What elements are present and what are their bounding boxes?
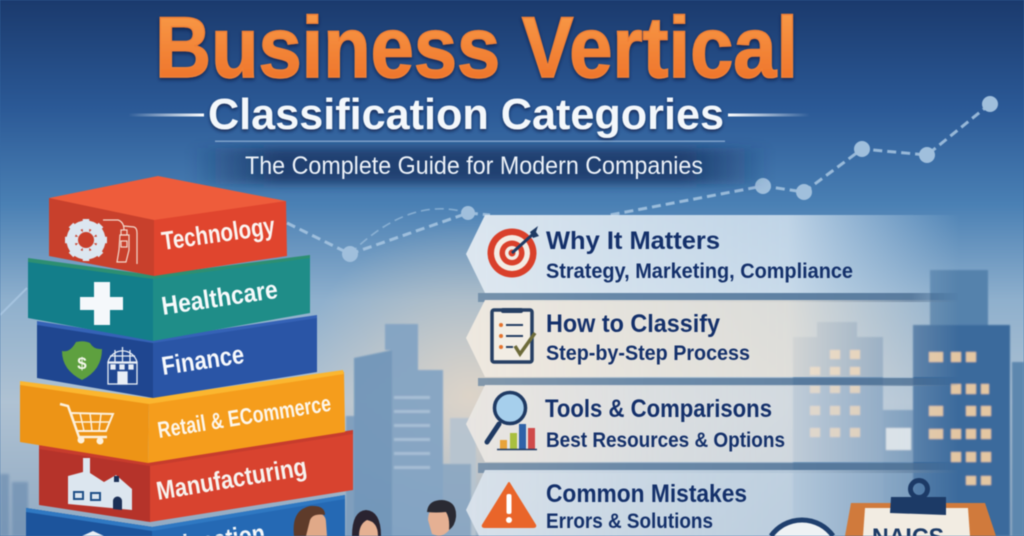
stacked blocks [20, 176, 353, 536]
banner: common mistakes [466, 470, 960, 536]
banner: why it matters [466, 215, 960, 302]
title: business vertical: Business Vertical [155, 0, 798, 96]
magnifier badge [771, 520, 833, 536]
block: manufacturing [39, 430, 353, 522]
banner: tools and comparisons [466, 385, 960, 473]
tagline: The Complete Guide for Modern Companies [245, 152, 703, 180]
text: errors and solutions: Errors & Solutions [546, 510, 713, 533]
icon: warning triangle [483, 483, 535, 527]
heading: common mistakes: Common Mistakes [546, 480, 747, 508]
person: woman [352, 510, 381, 536]
block: manufacturing: Manufacturing [154, 451, 309, 506]
block: healthcare [28, 255, 310, 341]
icon: clipboard checklist [492, 308, 535, 362]
text: best resources and options: Best Resources & Options [546, 429, 785, 452]
icon: circuit outline [103, 220, 137, 264]
block: education [26, 495, 345, 536]
block: retail and ecommerce [20, 370, 345, 463]
text: strategy, marketing, compliance: Strategy, Marketing, Compliance [546, 260, 853, 283]
people group [294, 500, 456, 536]
banner: how to classify [466, 300, 960, 386]
clipboard: NAICS [845, 480, 996, 536]
text: step-by-step process: Step-by-Step Process [546, 342, 750, 365]
person: man left [294, 506, 327, 536]
skyline: right buildings [793, 270, 1024, 536]
block: finance: Finance [159, 339, 246, 381]
icon: shopping cart [60, 404, 113, 444]
icon: factory [68, 458, 132, 510]
icon: medical cross [80, 282, 123, 325]
block: retail and ecommerce: Retail & ECommerce [156, 390, 333, 443]
icon: magnifier with bars [487, 392, 537, 450]
title band [190, 148, 770, 184]
skyline: distant left buildings [0, 474, 28, 536]
block: finance [37, 315, 317, 398]
icon: bank building [108, 347, 137, 384]
person: man right [427, 500, 456, 536]
block: technology: Technology [160, 210, 277, 256]
heading: why it matters: Why It Matters [546, 227, 720, 255]
line chart with dashed trend [0, 96, 998, 315]
icon: target [488, 226, 539, 278]
heading: tools and comparisons: Tools & Comparisons [545, 395, 772, 423]
subtitle: classification categories: Classification Categories [208, 90, 724, 139]
heading: how to classify: How to Classify [546, 310, 720, 338]
icon: green shield [62, 341, 102, 380]
block: healthcare: Healthcare [159, 274, 280, 321]
icon: gear [65, 219, 107, 261]
icon: green shield: $ [77, 354, 87, 373]
block: technology [49, 176, 287, 276]
skyline: central buildings [346, 324, 476, 536]
